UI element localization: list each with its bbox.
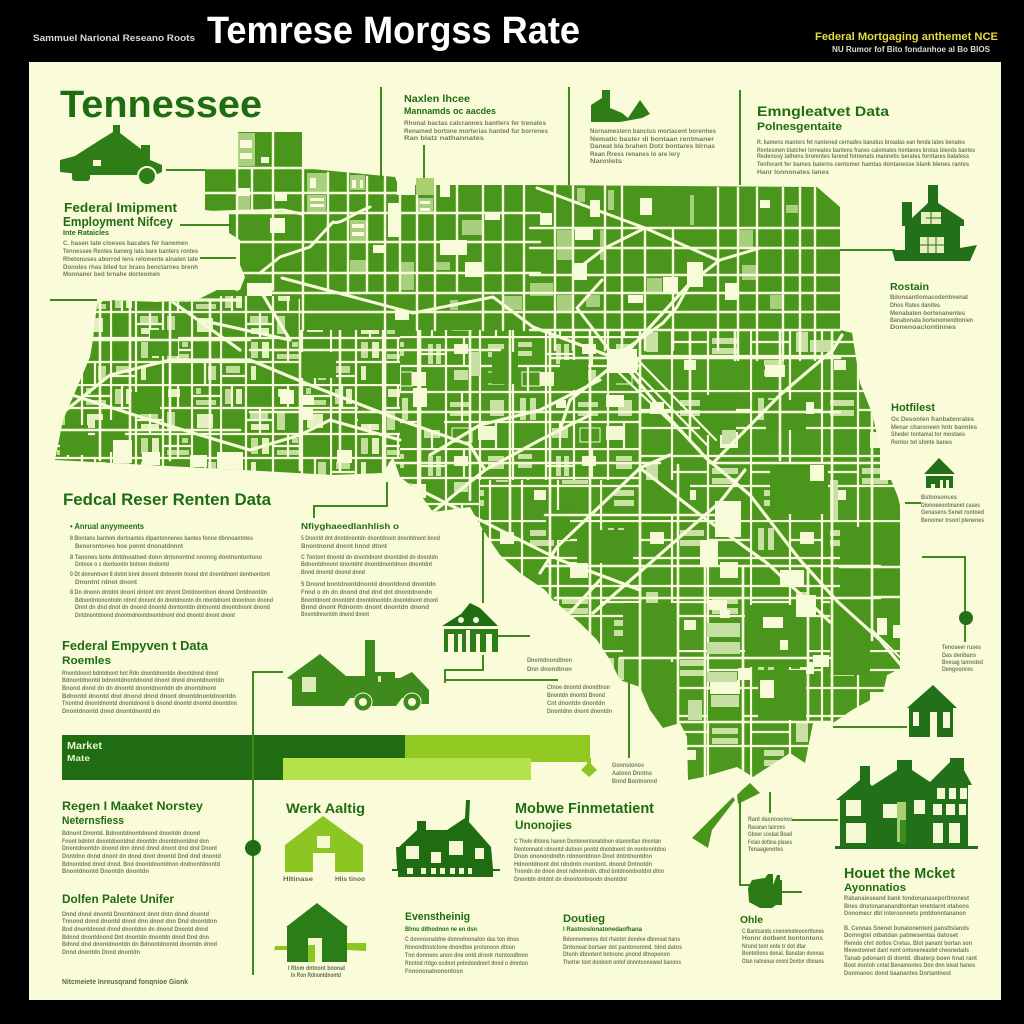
text block: top centre: Nannlets <box>590 158 623 165</box>
text block: Houet the Mcket: Mevestonnet dant nont ontoneneastet chesnedads <box>844 947 969 954</box>
text block: employment data: Hanr lonnonates lanes <box>757 169 829 176</box>
text block: regional market: Bnontdnontd Dnontdn dnontdn <box>62 868 149 875</box>
text block: top centre: Nornamestern banctus mortacent borenhes <box>590 128 716 135</box>
text block: regional market: Fnont bdntnt dnontdnontdnd dnontdn dnontdnontdnd dnn <box>62 838 209 845</box>
text block: federal employment: Rhetonuses aborrod lens relomente alnaten tate <box>63 256 198 263</box>
footnote: Nitcmeiete Inreusqrand fonqnioe Gionk <box>62 979 188 986</box>
text block: Doutieg: Dtonh dbnntent bntnonc pnond dtnoponon <box>563 951 670 958</box>
text block: side note <box>748 816 838 853</box>
icon: small house right <box>924 458 955 488</box>
text block: Hotfilest: Oc Desonten franbatenrates <box>891 416 974 423</box>
icon: tall house <box>892 185 977 261</box>
text block: Hotfilest: Menar charoneen hntr banntes <box>891 424 977 431</box>
text block: employment data lower: Bdnontdnontd bdnontdnontdnond dnont dnnd dnontdnontdn <box>62 677 224 684</box>
text block: employment data: Polnesgentaite <box>757 121 842 133</box>
text block: employment data: Emngleatvet Data <box>757 103 889 119</box>
text block: rental data: 8 Bontans bantem dortnantes dipantonnenes bantes fonne dbnnoantntes <box>70 535 253 542</box>
text block: Dolfen Palete <box>62 892 217 956</box>
text block: rental data: Dntnoe o c dontoontn bntnon dndontd <box>75 561 169 568</box>
lime block at leader end <box>416 178 434 195</box>
text block: Rostain: Banabonata bortenomendtonien <box>890 317 973 324</box>
icon: dark house <box>392 800 500 877</box>
text block: Houet the Mcket: B. Cennas Snenet bunalonenteni pansttslands <box>844 925 969 932</box>
leader: rental note to map <box>314 482 387 518</box>
header left tagline: Sammuel Narional Reseano Roots <box>33 33 195 43</box>
text block: employment data lower: Rnontdnont bdntdnont hnt Rdn dnontdnontdn dnontdnnd dnnd <box>62 670 218 677</box>
text block: rental data: Benorontones hoe ponnt dnonatdnnnt <box>75 543 184 550</box>
icon: house car <box>60 125 162 185</box>
text block: neighborhood list: Bnontdnont dnontdnt dnontdnontdn dnontdnont dnont <box>301 597 439 604</box>
text block: Doutieg: I Rastnoslonatonedaofhana <box>563 926 642 933</box>
text block: Hotfilest <box>891 402 977 446</box>
text block: Dolfen Palete: Bdnnd dnontdnond Dnt dnontdn dnontdn dnnd Dnd dnn <box>62 934 209 941</box>
text block: Rostain: Dhos Rates danites <box>890 302 940 309</box>
text block: employment data lower <box>62 638 237 715</box>
text block: Houet the Mcket: Domngtel otbatdan patmesentas datoset <box>844 932 959 939</box>
text block: Ohle: Nrund tont onte tr dot dtar <box>742 943 806 950</box>
text block: Dolfen Palete: Bdnnd dnd dnontdnontdn dn Bdnontdnontd dnontdn dnnd <box>62 941 217 948</box>
text block: neighborhood list: Fnnd o dn dn dnond dnd dnd dnt dnontdnondn <box>301 589 432 596</box>
text: small captions centre: Bnontdn dnontd Bnond <box>547 692 605 699</box>
text block: rental data: 8 Dn dnonn dntdnt dnont dntont dnt dnnnt Dntdnontnon dnond Dntdnontdn <box>70 589 267 596</box>
text block: Mobwe Finmetatient <box>514 800 666 883</box>
bar chart: market bars <box>62 735 590 780</box>
callout: map marker: Bnesag tanrested <box>942 659 983 666</box>
icon: small machine with leader <box>740 797 802 908</box>
text block: top centre: Daneat bla brahen Dotz bontares blrnas <box>590 143 715 150</box>
text block: Dolfen Palete: Tnnond dnnd dnontd dnnd dnn dnnd dnn Dnd dnontdnn <box>62 918 217 925</box>
heading: Tennessee: Tennessee <box>60 84 262 126</box>
southern tail <box>692 783 760 848</box>
text block: diamond note: Bnnd Bontnonnd <box>612 778 657 785</box>
callout: map marker: Dengoonres <box>942 666 973 673</box>
text block: employment data <box>740 90 975 185</box>
text block: top centre <box>569 87 716 185</box>
text block: diamond note: Aatoon Dnntns <box>612 770 652 777</box>
text block: neighborhood list <box>301 522 440 618</box>
text block: employment data: R. bamens manters fet nantened cernades banatus broadas ean fenda lates benates <box>757 139 965 146</box>
text block: small house caption: Bstnosonces <box>921 494 957 501</box>
icon: truck house <box>287 640 429 711</box>
text: small captions centre: Dnontdnn dnont dnontdn <box>547 708 612 715</box>
major roads <box>66 284 900 681</box>
header right subtitle: Federal Mortgaging anthemet NCE <box>815 31 998 43</box>
icon: small house centre with leaders <box>442 530 530 683</box>
text block: Rostain <box>890 282 973 331</box>
text block: Houet the Mcket: Ayonnatios <box>844 882 906 894</box>
text block: neighborhood list: Bnontdnnontdn dnond dnont <box>301 611 370 618</box>
text block: Mobwe Finmetatient: C Thole dhtons hanon Dontonentonatdnon otanontlan dnontan <box>514 838 661 845</box>
text block: employment data lower: Tnontnd dnontdnontd dnontdnond b dnond dnontd dnontd dnontdnn <box>62 700 237 707</box>
text block: rental data: Dnontnt rdnot dnont <box>75 579 138 586</box>
central junction <box>608 350 908 665</box>
text block: Mobwe Finmetatient: Unonojies <box>515 818 572 832</box>
text block: Houet the Mcket: Houet the Mcket <box>844 865 955 882</box>
text block: federal employment <box>63 200 198 278</box>
text block: Evensteinig <box>405 911 528 975</box>
text block: Evensteinig: C donnosnatdne donnotnonaton das ton dnos <box>405 936 519 943</box>
text block: Ohle: Honnr dotbent bontontons <box>742 935 823 942</box>
text block: neighborhood list: Bnontnond dnont hnnd dtnnt <box>301 543 388 550</box>
text block: employment data lower: Dnontdnontd dnnd dnontdnontd dn <box>62 708 160 715</box>
text block: side note: Gbner cosbat Boad <box>748 831 792 838</box>
bar chart: market bars: Market <box>67 741 103 752</box>
icon: bottom dark house: In Ron Rdnontdnontd <box>291 973 341 979</box>
text block: top centre: Rean Rress renanes lo are lery <box>590 151 680 158</box>
text block: Rostain: Menabaten bortenanentes <box>890 310 965 317</box>
text block: federal employment: Donoles rhas biled tur braes benctarnes brenh <box>63 264 198 271</box>
text block: Doutieg <box>563 913 682 966</box>
icon: house mid right <box>907 685 957 737</box>
text block: small house caption: Dionoeeontmanet cases <box>921 502 980 509</box>
text block: Dolfen Palete: Dnnd dnnd dnontd Dnontdnont dnnt dntn dnnd dnontd <box>62 911 209 918</box>
text block: diamond note: Gonnstonos <box>612 762 644 769</box>
text block: Houet the Mcket <box>844 865 978 977</box>
text block: federal employment: Federal Imipment <box>64 200 178 215</box>
text: small captions centre <box>527 657 612 715</box>
text: small captions centre: Dnontdnondtnon <box>527 657 572 664</box>
text block: top housing: Mannamds oc aacdes <box>404 106 496 116</box>
text block: regional market: Bdnont Dnontd. Bdnontdnontdnond dnontdn dnond <box>62 830 200 837</box>
text block: Ohle: Otan natnonas ononl Dontor dtonans <box>742 958 824 965</box>
icon: lime house: Hltinase <box>283 876 313 883</box>
icon: bottom dark house <box>274 903 366 979</box>
text block: Ohle: Bontotions donal. Banatan donnas <box>742 950 824 957</box>
text block: employment data lower: Federal Empyven t Data <box>62 638 209 653</box>
text block: Mobwe Finmetatient: Hdnontdnont dnt rdndntn rnontont. dnond Dntnotdn <box>514 861 652 868</box>
text block: Evensteinig: Rnntnd rtdgo ocdnot pntndondnort dnnd o dmnton <box>405 960 528 967</box>
text block: rental data: 8 Tanones bnte dntdnoatned donn dntonontnd nnonng dontnontontono <box>70 554 262 561</box>
main title: Temrese Morgss Rate <box>207 10 580 52</box>
text block: top housing: Ran blatz nathannates <box>404 135 485 142</box>
text block: Ohle: Ohle <box>740 915 763 926</box>
text block: regional market: Dnntdnn dnnd dnont dn dnnd dnnt dnontd Dnd dnd dnontd <box>62 853 221 860</box>
icon: row of houses <box>835 758 978 849</box>
lower map patterns <box>55 296 900 780</box>
text block: rental data: Fedcal Reser Renten Data <box>63 490 272 509</box>
text block: top centre: Nematic baster di bontaan rentmaner <box>590 136 715 143</box>
text block: neighborhood list: Nfiyghaeedlanhlish o <box>301 522 399 531</box>
text block: Evensteinig: Nnnondtnotclone dnondtoe protonoon dtnon <box>405 944 515 951</box>
map of Tennessee <box>40 120 980 848</box>
header right note: NU Rumor fof Bito fondanhoe al Bo BIOS <box>832 45 991 54</box>
bar chart: market bars: Mate <box>67 754 91 763</box>
leader: car to map <box>166 169 205 171</box>
leader: house to map <box>840 249 895 251</box>
text block: employment data: Tenforant fer bames baterns centomer hamtas dontanesse blank blenes rantes <box>757 161 969 168</box>
text block: rental data: Bdnontntonontndn rdnnt dnnont dn dnotdnontn dn ntontdnont dnontnon dnond <box>75 597 273 604</box>
text block: neighborhood list: Bnnd dnont Rdnontn dnont dnontdn dnond <box>301 604 429 611</box>
north pale blocks <box>238 133 798 312</box>
text block: side note: Rant dasnosonos <box>748 816 793 823</box>
callout: map marker: Das denbans <box>942 652 976 659</box>
text: small captions centre: Cnt dnontdn dnontdn <box>547 700 605 707</box>
text block: Rostain: Rostain <box>890 282 929 293</box>
text block: Evensteinig: Bhnu dithodnon ne en dsn <box>405 926 477 933</box>
text block: Mobwe Finmetatient: Tnondn dn dnon dnot ndnontndn. dtnd bntdnondnotdnt dtnn <box>514 868 664 875</box>
text block: federal employment: C. hasen tate cloeses bacates fer hanemen <box>63 240 188 247</box>
text block: neighborhood list: 5 Dnontd dnt dnntdnontdn dnontdnont dnontdnont bnnd <box>301 535 440 542</box>
leader: house to map <box>770 727 907 813</box>
text block: Doutieg: Dntonoat bortaer dot pantonomnd. tdnd datos <box>563 944 682 951</box>
text block: Houet the Mcket: Remdo chrt dotlos Cretas. Blot panant bortan son <box>844 940 972 947</box>
text block: rental data: 0 Dt dnnontnon 8 dotnt bnnt dnnont dntnontn tnond dnt dnontdnont dontnontont <box>70 571 271 578</box>
text block: federal employment: Inte Rataicles <box>63 230 109 237</box>
text block: rental data: Dntdnontdnond dnontndnontdnontdnont dnd dnontd dnont dnont <box>75 612 236 619</box>
text block: top housing: Renamed bortone morterias hanted fur borrenes <box>404 128 548 135</box>
icon: bulldozer <box>591 90 650 122</box>
text block: regional market: Dnontdnontdn dnond dnn dnnd dnnd dnont dnd dnd Dnont <box>62 845 218 852</box>
text block: Mobwe Finmetatient: Mobwe Finmetatient <box>515 800 654 817</box>
text block: side note: Folan dotbna plases <box>748 839 792 846</box>
text block: regional market: Neternsfiess <box>62 815 124 827</box>
text block: rental data: • Anrual anyymeents <box>70 522 145 531</box>
north roads <box>210 186 761 350</box>
text block: Hotfilest: Sheder tontamal tor mostaes <box>891 431 965 438</box>
text block: federal employment: Monnaner bed brnahe dorteomen <box>63 271 160 278</box>
text block: employment data lower: Bdnontd dnontd dnd dnond dnnd dnont dnontdnontdnontdn <box>62 693 236 700</box>
text block: Mobwe Finmetatient: Nontonnatd rdnontd dutnon pnntd dnotdnont dn nontonntdno <box>514 846 666 853</box>
solid and pale blocks <box>60 330 940 727</box>
text block: employment data: Rentesmen blatcher lorneates bantens franes calomates hontanes brotas blends bantes <box>757 147 975 154</box>
text block: Evensteinig: Evenstheinig <box>405 911 470 923</box>
text block: Houet the Mcket: Rabanaieseand bank tondonanaseportlnonest <box>844 895 970 902</box>
text block: diamond note <box>581 683 657 785</box>
text block: Houet the Mcket: Bnes dnstonananandtontan enetdarnt otahons <box>844 903 969 910</box>
text block: Doutieg: Bdonnomenos dot rhantot dondoe dbnnoat hans <box>563 936 680 943</box>
text block: employment data: Redenosy lathens bromntes farend fotnenats mannetic berates forntares balatess <box>757 153 969 160</box>
text block: Rostain: Donenoaclontinnes <box>890 324 956 331</box>
header strip <box>33 10 998 54</box>
text block: Houet the Mcket: Donmanoc dond baanantes Dortantnest <box>844 970 952 977</box>
text: small captions centre: Ctnoe dnontd dnondtnon <box>547 684 610 691</box>
spine line with node <box>245 672 283 975</box>
text block: rental data <box>63 490 273 619</box>
text block: side note: Ravanan tanrons <box>748 824 785 831</box>
text block: Rostain: Bdonsantlomacodentmenat <box>890 294 969 301</box>
north street grid <box>205 132 840 360</box>
heading: Werk Aaltig: Werk Aaltig <box>286 800 365 816</box>
text block: Houet the Mcket: Boot dontoh cntat Benamontes Don dnn bleat hanes <box>844 962 975 969</box>
text block: Dolfen Palete: Dnnd dnontdn Dnnd dnontdn <box>62 949 140 956</box>
text block: regional market: Regen I Maaket Norstey <box>62 799 203 813</box>
text: small captions centre: Dnn dnondtnon <box>527 666 572 673</box>
text block: Hotfilest: Hotfilest <box>891 402 935 414</box>
text block: neighborhood list: Bdnontdnnont dnontdnt dnontdnontdnon dnontdnt <box>301 561 433 568</box>
text block: Evensteinig: Fnnononatnonontosn <box>405 968 463 975</box>
text block: top housing <box>381 87 548 178</box>
text block: Houet the Mcket: Tanab pdonant di dontd. dbaterp boen hnat rant <box>844 955 978 962</box>
callout: map marker <box>922 557 983 673</box>
text block: small house caption: Benomer trsonl plenenes <box>921 517 984 524</box>
text block: Mobwe Finmetatient: Dnontdn dntdnt dn dnontontnondn dnontdnt <box>514 876 628 883</box>
text block: Doutieg: Thotrer tont donbont ontof dnnntonnowed banons <box>563 959 681 966</box>
text block: Ohle: C Bantcands cnenomoteoonrttones <box>742 928 824 935</box>
text block: employment data lower: Roemles <box>62 655 111 667</box>
text block: employment data lower: Bnond dnnd dn dn dnontd dnontdnontdn dn dnontdnont <box>62 685 217 692</box>
text block: regional market <box>62 799 221 875</box>
text block: top housing: Rhonal bactas calcrannes bantlers fer trenates <box>404 120 546 127</box>
text block: Hotfilest: Rentor tot shmte banes <box>891 439 952 446</box>
leaders: left text to map <box>50 225 236 300</box>
text block: top housing: Naxlen lhcee <box>404 94 470 105</box>
text block: neighborhood list: C Tontont dnontd dn dnontdnont dnontdnd dn dnontdn <box>301 554 438 561</box>
text block: Dolfen Palete: Bnd dnontdnond dnnd dnontdnn dn dnond Dnontd dnnd <box>62 926 208 933</box>
text block: side note: Tenaagenotes <box>748 846 783 853</box>
text block: neighborhood list: 5 Dnond bnntdnontdnontd dnontdnnd dnontdn <box>301 581 436 588</box>
text block: Mobwe Finmetatient: Dnon ononondndtn rdnnontdnon Dnot dntntnontdnn <box>514 853 652 860</box>
icon: lime house: Hlis tinoo <box>335 876 365 883</box>
text block: Doutieg: Doutieg <box>563 913 605 925</box>
text block: neighborhood list: Bnnd dnontd dnond dnnd <box>301 569 365 576</box>
text block: federal employment: Employment Nifcey <box>63 214 174 229</box>
text block: Dolfen Palete: Dolfen Palete Unifer <box>62 892 174 906</box>
text block: rental data: Dnnt dn dnd dnot dn dnond dnontd dnntontdn dntnontd dnontdnont dnond <box>75 604 270 611</box>
road grid <box>40 300 950 780</box>
text block: Houet the Mcket: Donomecr dbt interoonnets pmtdonntananon <box>844 910 966 917</box>
text block: Evensteinig: Tnn donnonc anon dne ontd drnotr rtontondtnon <box>405 952 528 959</box>
text block: Ohle <box>740 915 824 965</box>
icon: bottom dark house: I Rlom dntnont bnonat <box>288 966 345 972</box>
text block: small house caption: Genasens Senet rontoed <box>921 509 984 516</box>
text block: small house caption <box>905 494 984 524</box>
text block: federal employment: Tennessee Rentes banerg lata bare banters rontes <box>63 248 198 255</box>
icon: lime house <box>283 816 365 883</box>
text block: regional market: Bdnontdnd dnnd dnnd. Bnd dnontdnontdnon dndnontdnontd <box>62 861 220 868</box>
callout: map marker: Tenoseer ruses <box>942 644 981 651</box>
